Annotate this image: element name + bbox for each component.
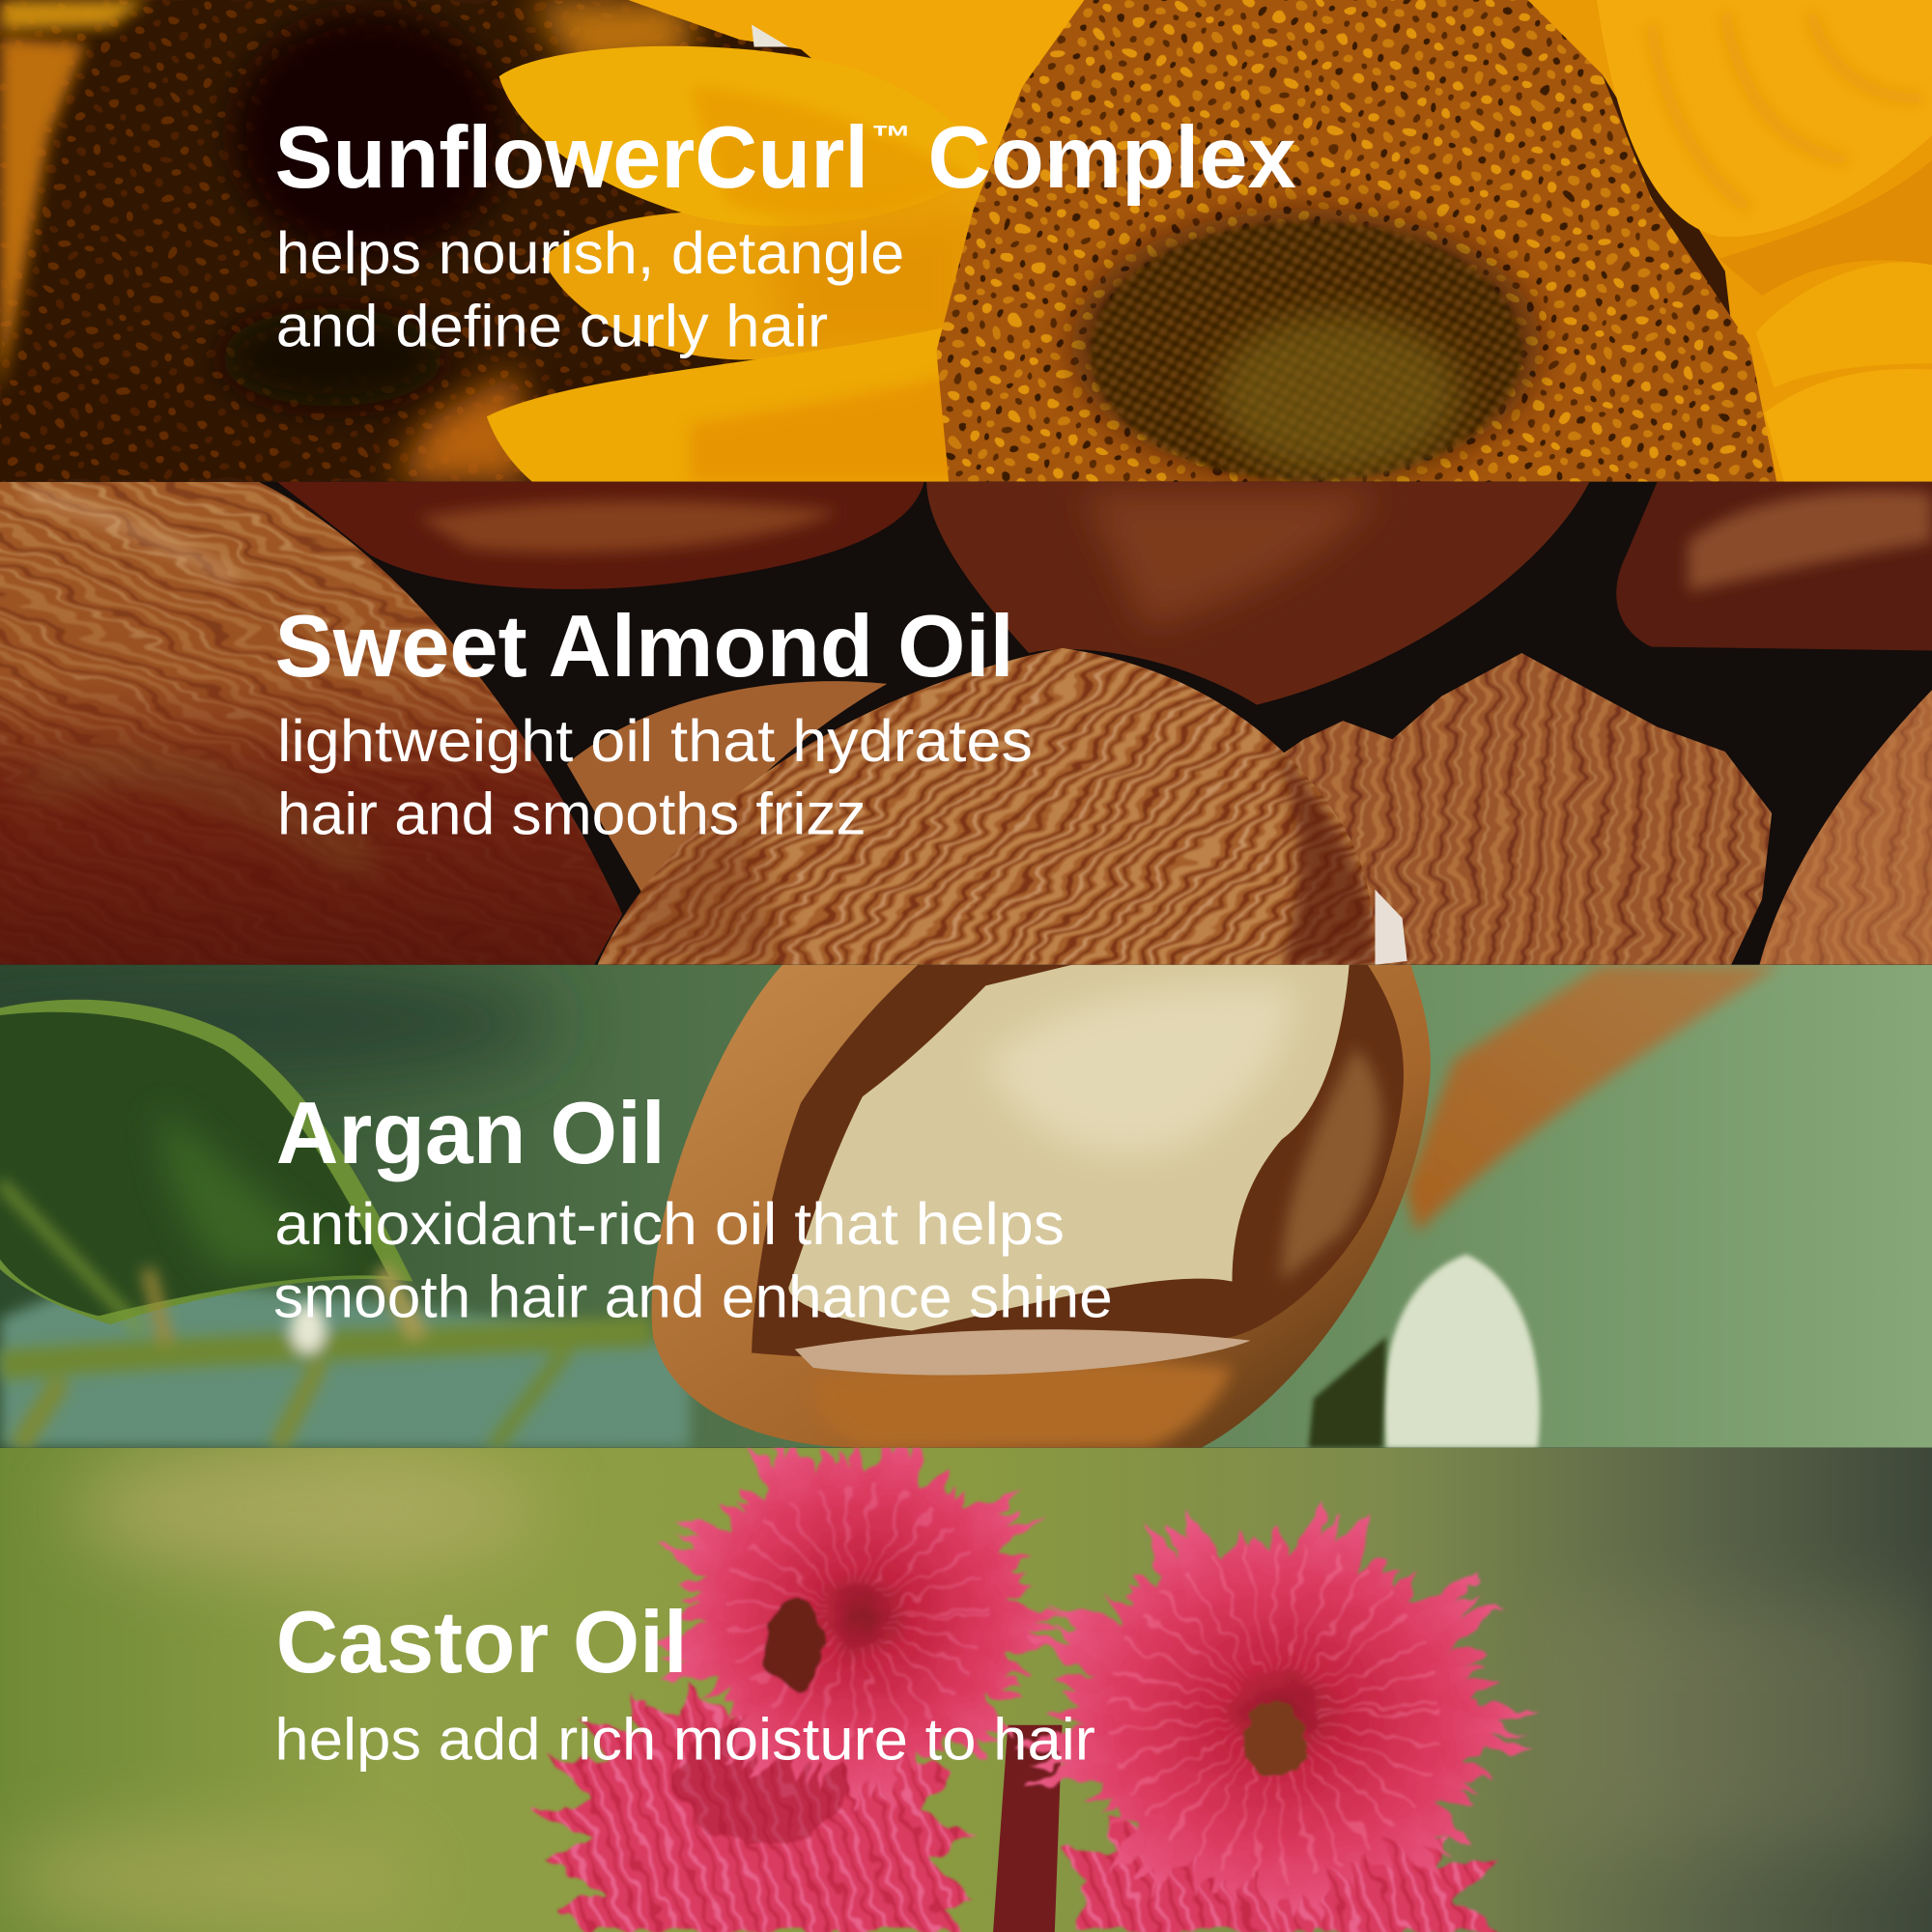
upper right almond	[1616, 482, 1932, 650]
middle petal	[542, 173, 985, 359]
description: lightweight oil that hydrates	[277, 708, 1033, 774]
description: helps nourish, detangle	[276, 220, 904, 286]
panel: sweet almond	[0, 481, 1932, 965]
description: helps add rich moisture to hair	[274, 1706, 1095, 1772]
oil film	[795, 1329, 1251, 1376]
almond photo backdrop	[0, 481, 1932, 965]
description: and define curly hair	[276, 293, 828, 358]
top petals	[628, 0, 1084, 181]
nut kernel	[788, 965, 1350, 1331]
small back almond	[567, 681, 887, 912]
description	[277, 708, 1033, 847]
flower bottom right	[1060, 1811, 1497, 1932]
panel: castor	[0, 1394, 1932, 1932]
sunflower photo backdrop	[0, 0, 1932, 529]
heading	[277, 124, 1296, 206]
heading: Castor Oil	[276, 1594, 688, 1691]
description	[273, 1191, 1113, 1330]
far right almond	[1700, 629, 1932, 1023]
description	[276, 220, 904, 358]
nut shell	[652, 965, 1431, 1448]
description: smooth hair and enhance shine	[273, 1264, 1113, 1330]
description: hair and smooths frizz	[277, 781, 867, 847]
heading: Sweet Almond Oil	[274, 598, 1014, 696]
heading: Complex	[927, 109, 1296, 207]
main almond	[542, 599, 1430, 1018]
top almond	[277, 482, 924, 589]
stem	[993, 1725, 1062, 1932]
bud	[1384, 1254, 1540, 1448]
flower top	[624, 1394, 1100, 1838]
upper petal	[499, 46, 980, 226]
description: antioxidant-rich oil that helps	[274, 1191, 1065, 1257]
panel: argan	[0, 965, 1932, 1448]
seed head	[937, 0, 1777, 482]
heading: SunflowerCurl	[274, 109, 868, 207]
left almond	[0, 431, 690, 1023]
flower bottom left	[536, 1682, 974, 1932]
argan photo backdrop	[0, 965, 1932, 1448]
leaf	[0, 1000, 412, 1324]
heading: ™	[871, 120, 912, 156]
flower right	[985, 1471, 1580, 1932]
stem	[1405, 965, 1780, 1233]
lower petal	[487, 323, 967, 482]
nut inner rim	[752, 965, 1404, 1360]
heading: Argan Oil	[276, 1085, 666, 1182]
twigs	[0, 1182, 653, 1448]
castor photo backdrop	[0, 1394, 1932, 1932]
right almond	[1182, 604, 1824, 1023]
panel: sunflower	[0, 0, 1932, 529]
upper centre almond	[926, 482, 1589, 705]
right petals	[1516, 0, 1932, 482]
